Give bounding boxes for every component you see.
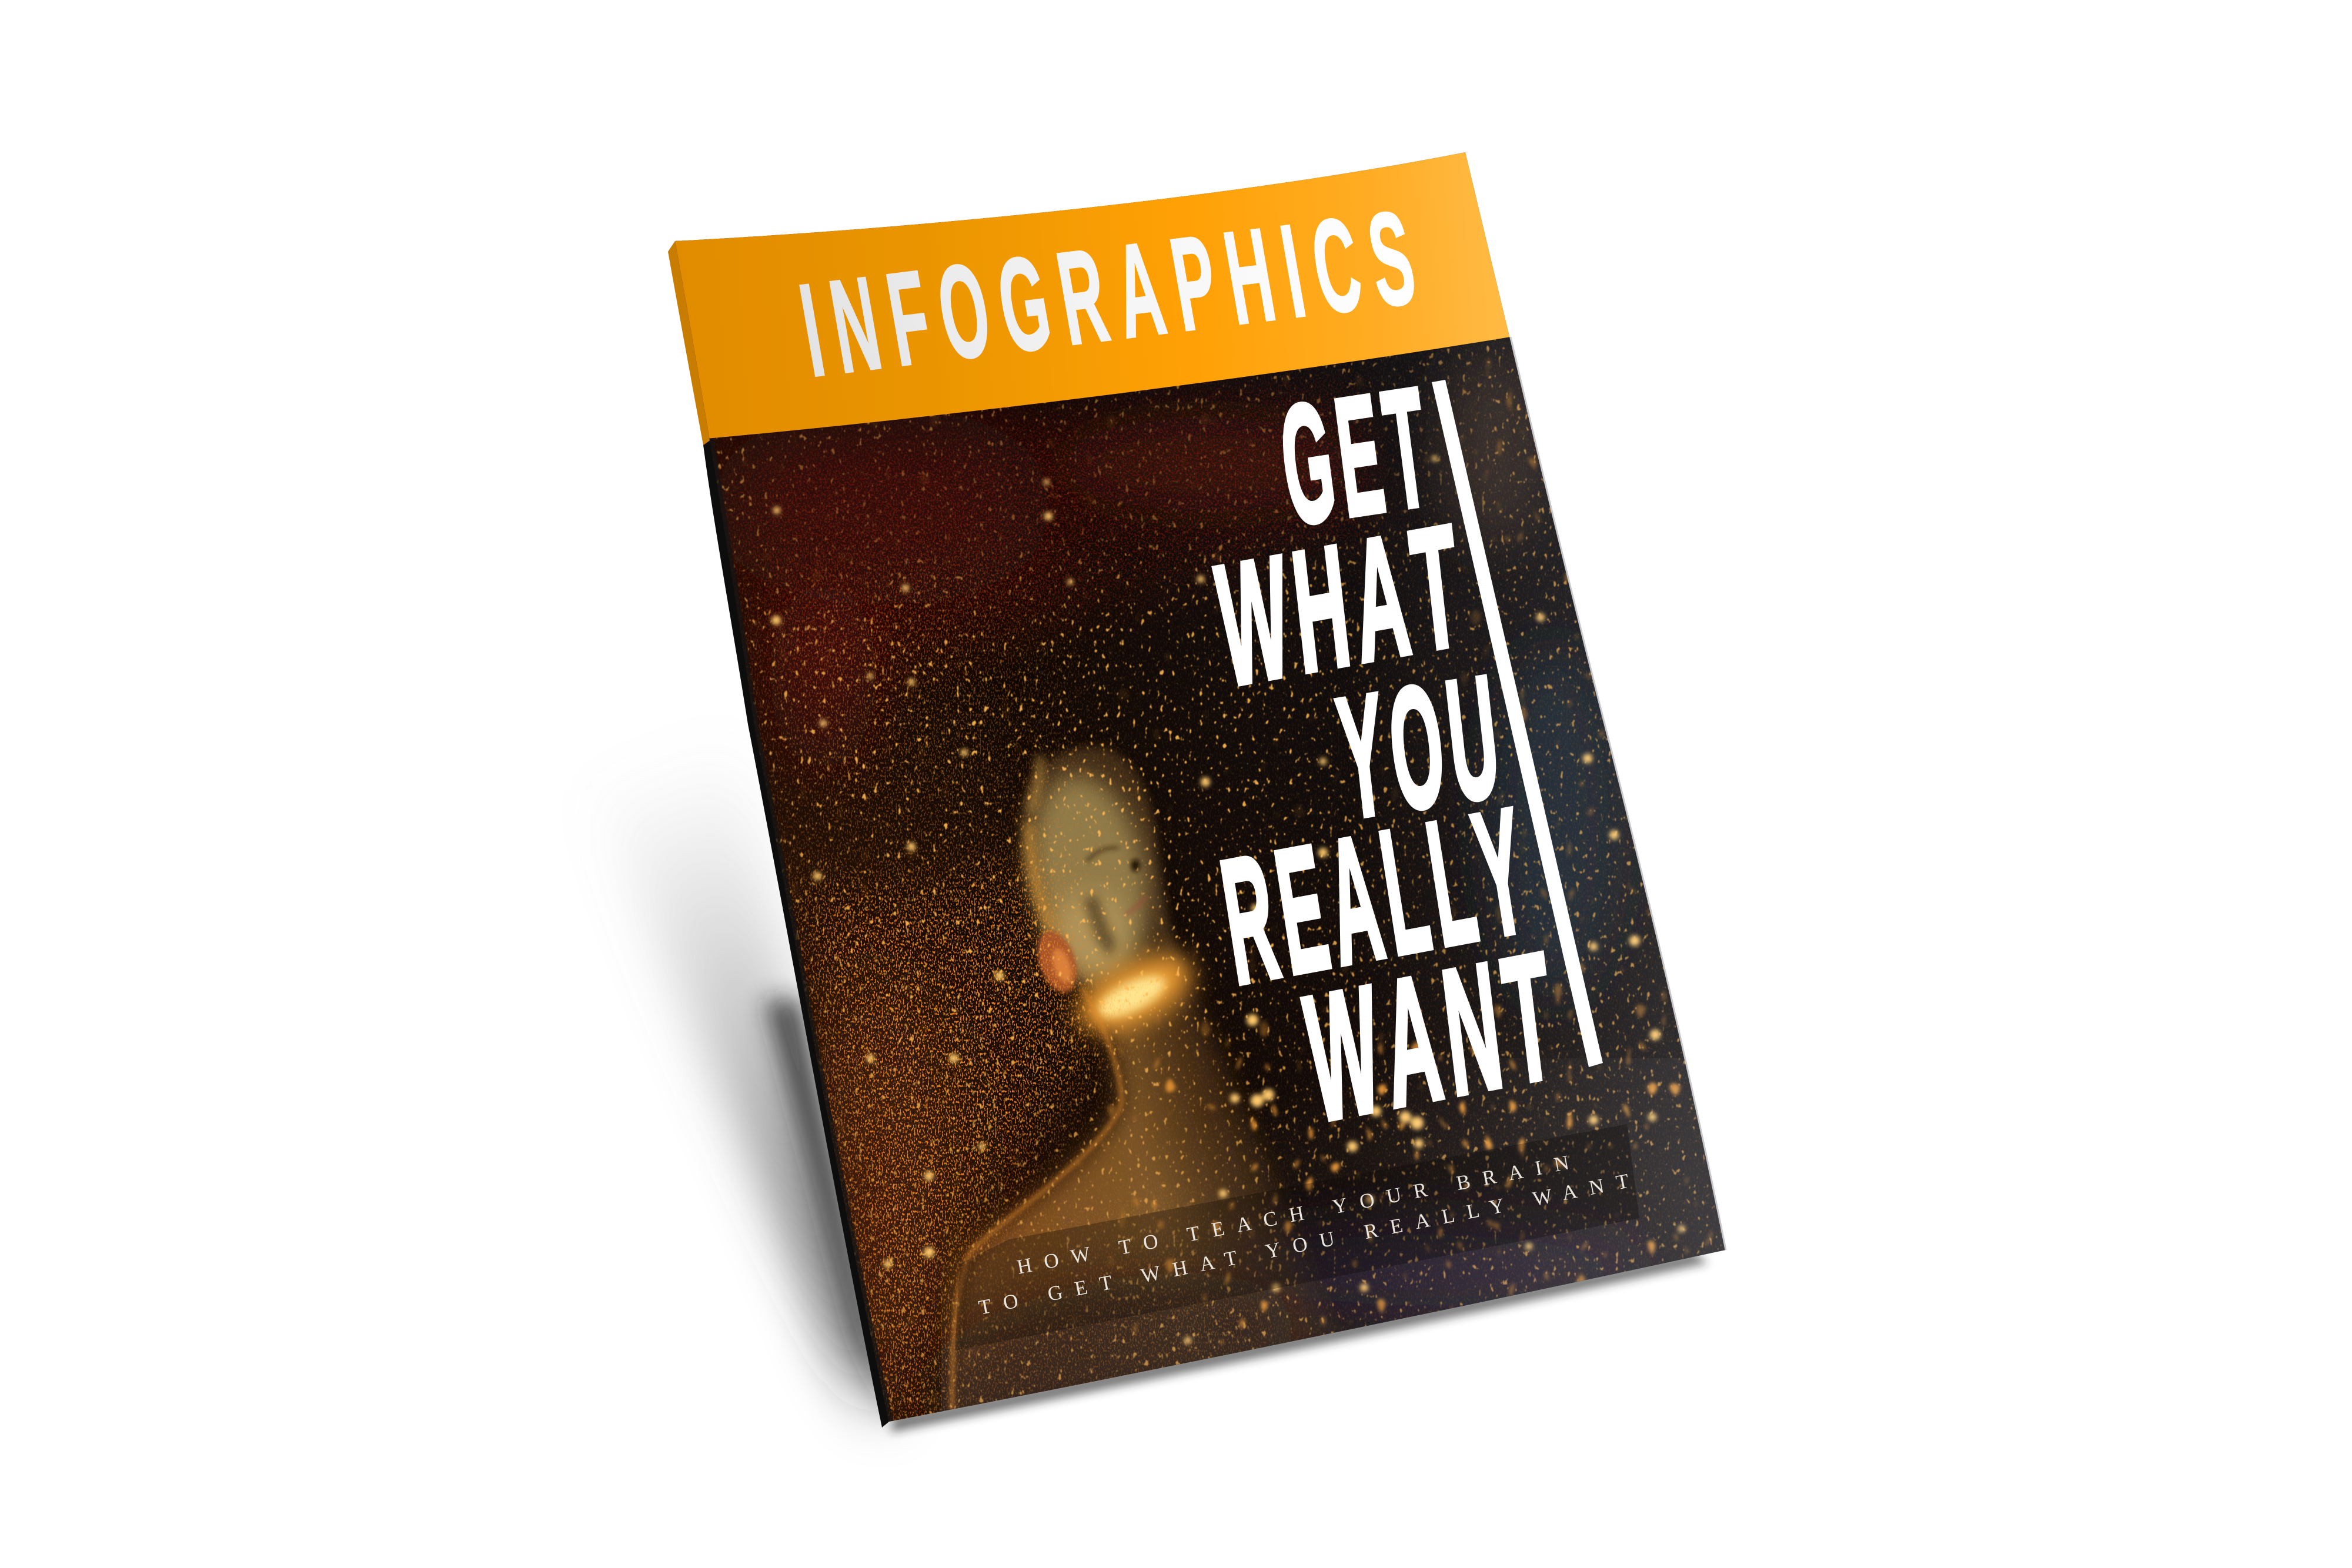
- title line: REALLY: REALLY: [1211, 770, 1544, 1022]
- bright spark highlights: [771, 456, 1685, 1344]
- blurred bokeh droplets: [647, 147, 1764, 1440]
- vertical white bar: [1432, 380, 1603, 1067]
- chest shadow: [900, 1243, 1311, 1473]
- dark subtitle strip: [955, 1124, 1639, 1350]
- red grain: [647, 147, 1764, 1440]
- figure: head: [1015, 747, 1184, 1003]
- title line: WANT: WANT: [1297, 914, 1571, 1160]
- lit face: [1015, 765, 1162, 987]
- rim light on neck and shoulder: [952, 988, 1121, 1411]
- orange title band: [647, 118, 1588, 444]
- main title: [1209, 351, 1571, 1160]
- subtitle: [977, 1151, 1631, 1319]
- cover photo: man in rain of golden sparks: [675, 152, 1726, 1422]
- band heading: INFOGRAPHICS: INFOGRAPHICS: [791, 182, 1438, 404]
- subtitle line 2: TO GET WHAT YOU REALLY WANT: [977, 1169, 1631, 1319]
- cast shadow under the bottom edge: [891, 1252, 1708, 1432]
- colour washes: [706, 347, 1646, 1429]
- sheen on right side: [941, 147, 1764, 1440]
- right edge highlight: [1511, 337, 1726, 1250]
- left edge darkening: [675, 241, 889, 1422]
- title line: YOU: YOU: [1330, 638, 1514, 855]
- magazine cover mockup: [628, 152, 1726, 1440]
- figure: body and neck: [952, 976, 1341, 1411]
- title line: GET: GET: [1271, 351, 1444, 560]
- facial shading: [1083, 895, 1116, 957]
- fine sparks grain: [647, 147, 1764, 1440]
- magazine spine: [668, 241, 889, 1427]
- neck glow: [1067, 940, 1203, 1047]
- cast shadow on the left: [594, 723, 891, 1426]
- figure: ear: [1031, 926, 1084, 998]
- head silhouette: [1021, 747, 1184, 1003]
- title line: WHAT: WHAT: [1209, 487, 1476, 723]
- golden droplets: [647, 147, 1764, 1440]
- subtitle line 1: HOW TO TEACH YOUR BRAIN: [1015, 1151, 1571, 1279]
